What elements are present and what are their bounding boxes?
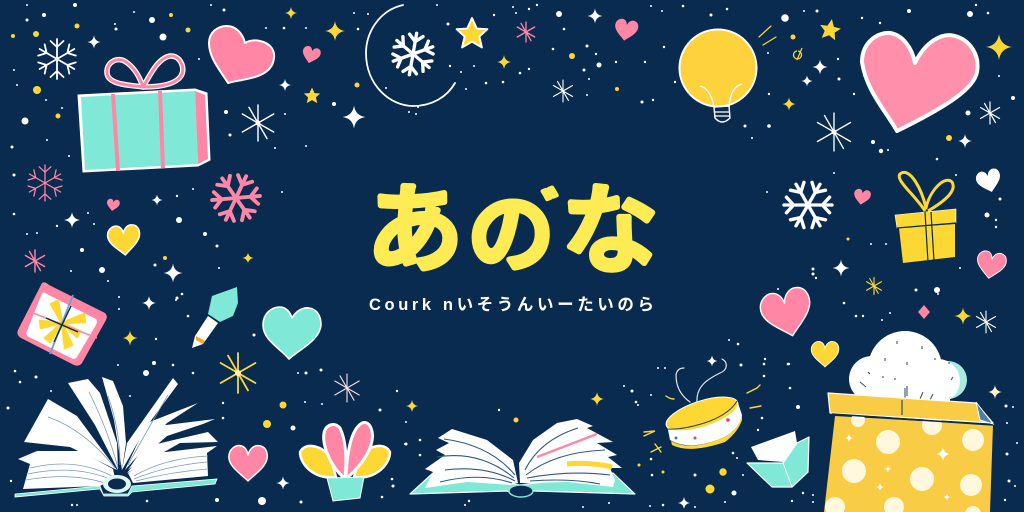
title: な	[562, 153, 658, 292]
icon: tilted pink gift	[17, 282, 107, 366]
icon: large open book	[15, 377, 218, 497]
icon: big polka dot gift	[824, 331, 993, 512]
icon: small teal book	[747, 431, 809, 487]
bursts	[25, 22, 1000, 402]
hearts	[106, 18, 1008, 481]
title: ゛	[542, 172, 590, 242]
title: あ	[367, 152, 463, 291]
title: の	[468, 164, 554, 289]
icon: paint brush	[192, 287, 238, 348]
moon crescent	[366, 5, 455, 106]
icon: teal gift box	[78, 56, 210, 172]
subtitle: Courk nいそうんいーたいのら	[369, 295, 654, 314]
pink diamond sparkle	[918, 305, 930, 319]
stars	[304, 17, 842, 103]
icon: second open book	[410, 419, 635, 497]
icon: drum with steam	[644, 359, 761, 452]
icon: light bulb	[680, 26, 802, 122]
yellow sparkles	[122, 7, 1012, 412]
icon: plant pot	[300, 423, 390, 501]
snowflakes	[26, 30, 841, 238]
title	[367, 152, 658, 292]
icon: small yellow gift	[895, 172, 956, 263]
